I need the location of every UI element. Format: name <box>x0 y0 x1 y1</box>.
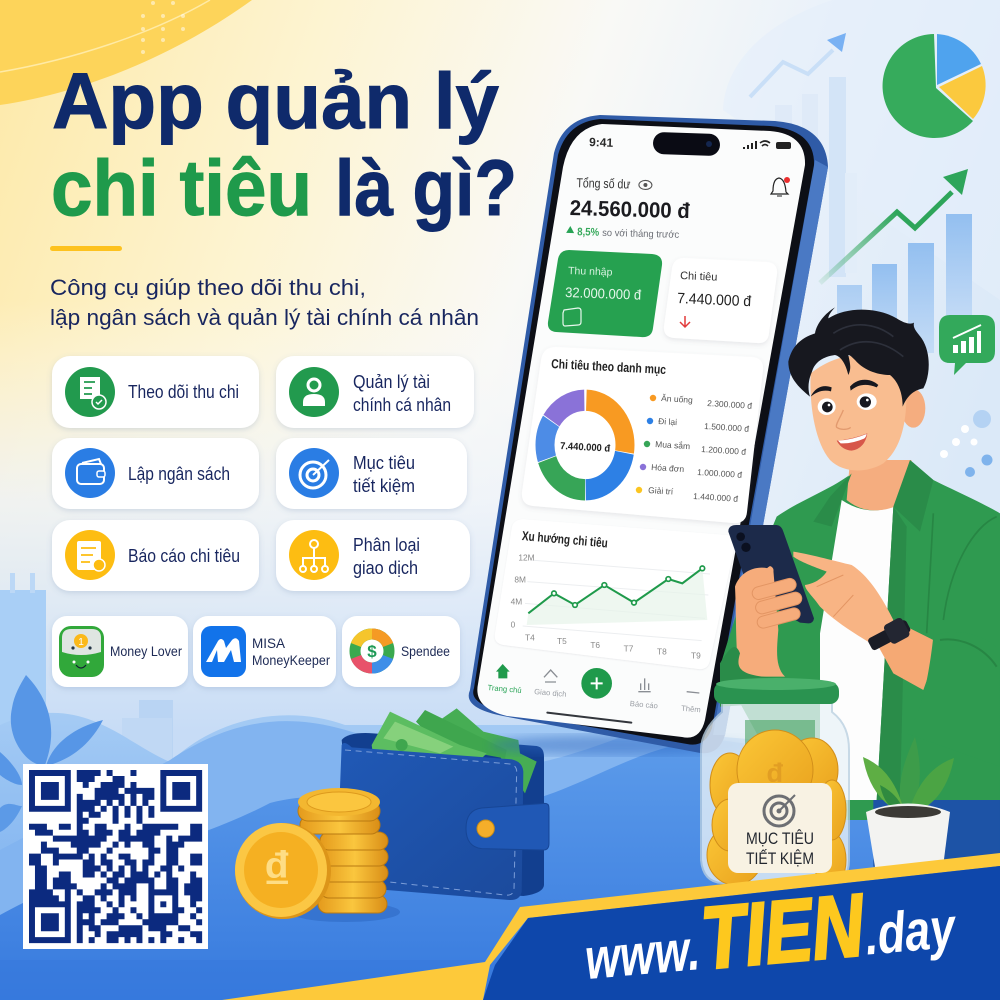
savings jar: ₫ <box>765 757 785 799</box>
trend chart card: 0 <box>511 619 516 629</box>
donut legend: 1.200.000 đ <box>701 444 747 457</box>
ear <box>901 389 925 428</box>
wallet with cash <box>340 708 549 900</box>
website url: TIEN <box>697 875 869 988</box>
title: là gì? <box>335 143 517 232</box>
trend chart card <box>487 519 735 723</box>
trend chart card: Xu hướng chi tiêu <box>521 528 608 550</box>
subtitle: lập ngân sách và quản lý tài chính cá nhân <box>50 305 479 330</box>
coin with dong sign: ₫ <box>263 841 291 901</box>
coins in jar <box>707 730 846 888</box>
wallet front <box>340 743 523 900</box>
income card: 32.000.000 đ <box>565 284 642 303</box>
title: chi tiêu <box>51 143 312 232</box>
feature card: theo doi thu chi: Theo dõi thu chi <box>128 382 239 402</box>
t-shirt <box>820 500 893 800</box>
icon: receipt check <box>65 367 115 417</box>
donut legend: 1.440.000 đ <box>693 491 739 504</box>
cash <box>372 708 537 793</box>
neck <box>847 460 912 510</box>
icon: MISA <box>201 626 246 677</box>
small phone <box>728 525 814 623</box>
donut legend: 2.300.000 đ <box>707 398 753 411</box>
potted plant <box>863 737 954 867</box>
trend chart card: T4 <box>525 633 535 643</box>
feature card: lap ngan sach: Lập ngân sách <box>128 464 230 484</box>
trend chart card: T9 <box>691 651 701 661</box>
trend chart card: T8 <box>657 647 667 657</box>
expense card <box>664 258 777 343</box>
icon: hierarchy <box>289 530 339 580</box>
green chat bubble icon <box>939 315 995 375</box>
icon: person <box>289 367 339 417</box>
wallet back <box>342 733 544 896</box>
tab bar <box>487 664 701 723</box>
city skyline <box>0 573 173 768</box>
left hand <box>735 566 803 677</box>
jar label: MỤC TIÊU <box>746 829 814 848</box>
tab bar: Trang chủ <box>487 683 522 695</box>
icon: Money Lover: 1 <box>78 637 84 648</box>
icon: wallet <box>65 448 115 498</box>
bottom ribbon <box>222 853 1000 1000</box>
donut chart <box>545 400 625 490</box>
donut legend <box>636 393 753 504</box>
feature card: quan ly tai chinh <box>276 356 474 428</box>
blue hills and floor <box>0 713 1000 1000</box>
app card: MISA MoneyKeeper <box>193 616 336 687</box>
website url: .day <box>862 896 960 968</box>
feature card: phan loai giao dich <box>276 520 470 591</box>
tab bar: Báo cáo <box>629 699 658 710</box>
donut legend: Ăn uống <box>661 393 693 405</box>
donut legend: Hóa đơn <box>651 462 685 474</box>
app card: Spendee <box>342 616 460 687</box>
phone <box>469 115 828 755</box>
donut legend: Mua sắm <box>655 439 690 451</box>
trend chart card: T5 <box>557 636 567 646</box>
trend chart card: 8M <box>514 574 526 584</box>
app card: Spendee: Spendee <box>401 644 450 659</box>
balance header: Tổng số dư <box>576 175 631 192</box>
icon: target <box>289 448 339 498</box>
donut legend: 1.000.000 đ <box>697 467 743 480</box>
income card <box>548 250 662 337</box>
donut legend: Giải trí <box>648 485 674 497</box>
category card <box>522 347 763 523</box>
subtitle: Công cụ giúp theo dõi thu chi, <box>50 275 366 300</box>
expense card: 7.440.000 đ <box>677 290 752 310</box>
feature card: bao cao chi tieu <box>52 520 259 591</box>
coin stack <box>235 788 400 922</box>
trend chart card: 4M <box>511 597 522 607</box>
balance header: 24.560.000 đ <box>569 196 691 223</box>
feature card: quan ly tai chinh: chính cá nhân <box>353 395 451 415</box>
hair <box>788 307 929 407</box>
tab bar: Giao dịch <box>534 687 567 699</box>
app card: Money Lover: Money Lover <box>110 644 182 659</box>
savings jar <box>701 678 849 888</box>
mouth <box>837 433 867 451</box>
jar label <box>728 783 832 873</box>
donut legend: Đi lại <box>658 416 677 427</box>
expense card: Chi tiêu <box>680 270 718 284</box>
eyebrows <box>811 380 878 397</box>
income card: Thu nhập <box>568 265 613 279</box>
yellow underline <box>50 246 122 251</box>
title <box>51 56 517 232</box>
category card: 7.440.000 đ <box>560 441 611 455</box>
feature card: quan ly tai chinh: Quản lý tài <box>353 372 430 392</box>
title: App quản lý <box>52 56 499 145</box>
balance header <box>566 175 691 241</box>
website url: www. <box>582 917 703 992</box>
left sleeve <box>720 647 785 707</box>
feature card: muc tieu tiet kiem <box>276 438 467 509</box>
feature card: bao cao chi tieu: Báo cáo chi tiêu <box>128 546 240 566</box>
trend chart card: T7 <box>624 643 634 653</box>
person holding phone <box>720 307 1000 867</box>
jar label: TIẾT KIỆM <box>746 849 814 868</box>
face <box>810 356 906 470</box>
strap <box>466 803 549 850</box>
green growth arrow <box>820 169 968 283</box>
trend line <box>528 568 702 613</box>
nose <box>836 410 851 429</box>
pie chart <box>883 34 986 138</box>
jar lid <box>714 678 839 704</box>
app card: Money Lover <box>52 616 188 687</box>
donut legend: 1.500.000 đ <box>704 421 750 434</box>
watch <box>865 615 913 654</box>
collar <box>813 473 852 527</box>
shirt <box>720 460 1000 820</box>
decorative faint bars and blue arrow <box>750 33 857 277</box>
eyes <box>818 393 877 415</box>
decorative leaves <box>0 675 103 832</box>
feature card: muc tieu tiet kiem: Mục tiêu <box>353 453 415 473</box>
right sleeve <box>907 632 1000 767</box>
decorative dots <box>940 410 992 477</box>
trend chart card: 12M <box>518 553 535 563</box>
trend chart card: T6 <box>590 640 600 650</box>
website url <box>580 867 961 998</box>
feature card: lap ngan sach <box>52 438 259 509</box>
right hand <box>793 552 893 647</box>
feature card: muc tieu tiet kiem: tiết kiệm <box>353 476 415 496</box>
QR code <box>23 764 208 949</box>
bell icon <box>771 177 790 196</box>
app card: MISA MoneyKeeper: MISA <box>252 636 285 651</box>
subtitle <box>50 275 479 330</box>
status bar <box>589 132 791 156</box>
icon: report <box>65 530 115 580</box>
feature card: phan loai giao dich: giao dịch <box>353 558 418 578</box>
icon: Spendee: $ <box>367 642 377 661</box>
feature card: phan loai giao dich: Phân loại <box>353 535 420 555</box>
coin with dong sign <box>235 823 331 919</box>
balance header: so với tháng trước <box>602 228 679 241</box>
app card: MISA MoneyKeeper: MoneyKeeper <box>252 653 330 668</box>
screen <box>477 124 805 738</box>
balance header: 8,5% <box>577 226 599 239</box>
feature card: theo doi thu chi <box>52 356 259 428</box>
pants <box>873 800 1000 867</box>
status bar: 9:41 <box>589 135 614 150</box>
category card: Chi tiêu theo danh mục <box>551 356 666 377</box>
tab bar: Thêm <box>681 704 701 714</box>
growth bars <box>837 214 972 355</box>
right forearm <box>877 628 940 690</box>
